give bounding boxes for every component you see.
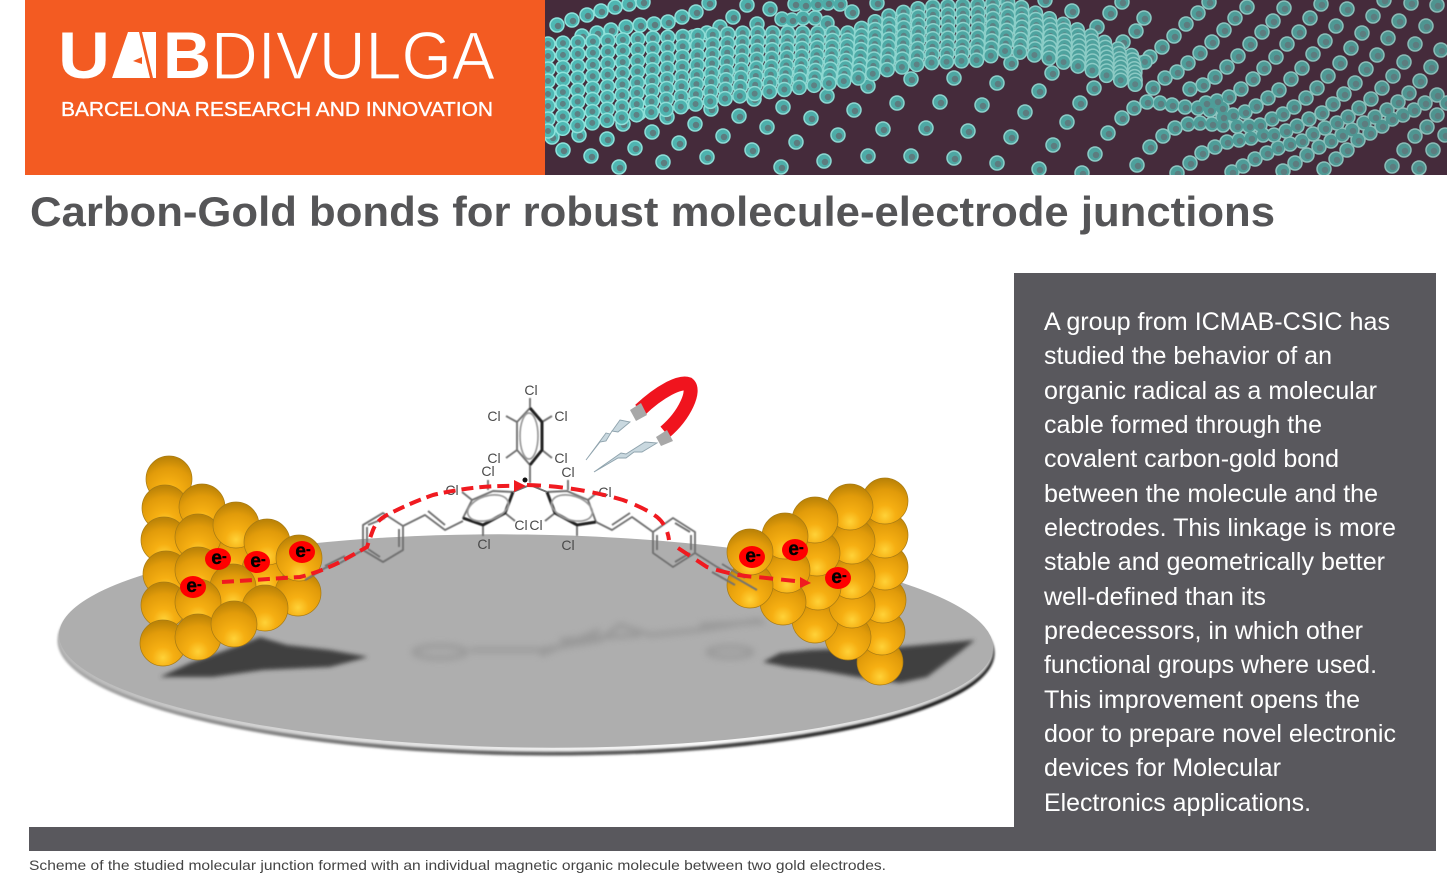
left vinylene and benzene linker <box>305 511 463 580</box>
electrons on left electrode: e <box>186 576 197 597</box>
chlorine labels: Cl <box>561 464 575 480</box>
logo: UAB DIVULGA: A <box>120 39 148 83</box>
logo: UAB DIVULGA: B <box>163 18 211 92</box>
right chlorinated ring <box>545 480 598 536</box>
electrons on right electrode <box>739 539 851 589</box>
panel: description text: door to prepare novel electronic <box>1044 720 1396 748</box>
icon: magnet <box>630 383 691 446</box>
panel: description text: functional groups where used. <box>1044 651 1377 679</box>
right vinylene and benzene linker <box>596 513 757 590</box>
logo: UAB DIVULGA <box>58 18 496 94</box>
header banner <box>25 0 1447 175</box>
electrons on right electrode: - <box>799 539 804 555</box>
panel: description text: cable formed through the <box>1044 411 1322 439</box>
chlorine labels: Cl <box>598 484 612 500</box>
chlorine labels: Cl <box>529 517 543 533</box>
panel: description text: covalent carbon-gold bond <box>1044 445 1339 473</box>
left chlorinated ring <box>462 480 515 536</box>
panel: description text: stable and geometrically better <box>1044 548 1385 576</box>
electrons on left electrode: e <box>211 548 222 569</box>
left gold electrode <box>140 456 322 666</box>
chlorine labels: Cl <box>477 536 491 552</box>
molecule structure <box>305 382 757 590</box>
chlorine labels: Cl <box>481 463 495 479</box>
chlorine labels: Cl <box>554 408 568 424</box>
electrons on left electrode: e <box>295 541 306 562</box>
panel: description text: A group from ICMAB-CSIC has <box>1044 308 1390 336</box>
chlorine labels: Cl <box>487 408 501 424</box>
electrons on left electrode: - <box>222 548 227 564</box>
caption: Scheme of the studied molecular junction formed with an individual magnetic organic molecule between two gold electrodes. <box>29 857 886 873</box>
top chlorinated ring <box>506 398 552 483</box>
silver disk surface <box>56 528 996 762</box>
icon: magnetic field bolts <box>586 420 657 472</box>
radical centre <box>513 478 547 492</box>
chlorine labels: Cl <box>514 517 528 533</box>
chlorine labels: Cl <box>445 482 459 498</box>
panel: description text: electrodes. This linkage is more <box>1044 514 1396 542</box>
electrons on right electrode: - <box>842 567 847 583</box>
electrons on left electrode: - <box>306 541 311 557</box>
electrons on right electrode: e <box>788 539 799 560</box>
arrow: electron path left to centre <box>222 480 526 582</box>
arrow: electron path centre to right <box>527 485 811 588</box>
illustration: molecular junction <box>56 382 996 762</box>
right gold electrode <box>727 478 908 685</box>
electrons on right electrode: - <box>756 546 761 562</box>
electrons on left electrode: - <box>261 551 266 567</box>
electrons on left electrode: - <box>197 576 202 592</box>
chlorine labels: Cl <box>561 537 575 553</box>
electrons on right electrode: e <box>745 546 756 567</box>
electrons on left electrode: e <box>250 551 261 572</box>
panel: description text <box>1014 273 1436 851</box>
panel: description text: well-defined than its <box>1043 583 1266 611</box>
chlorine labels: Cl <box>524 382 538 398</box>
panel: description text: studied the behavior of an <box>1044 342 1332 370</box>
panel: description text: devices for Molecular <box>1044 754 1281 782</box>
title: Carbon-Gold bonds for robust molecule-electrode junctions <box>30 188 1275 235</box>
orange logo block <box>25 0 546 175</box>
chlorine labels: Cl <box>554 450 568 466</box>
panel: description text: between the molecule and the <box>1044 480 1378 508</box>
panel: description text: Electronics applications. <box>1044 789 1311 817</box>
chlorine labels <box>445 382 612 553</box>
dotted molecular pattern image <box>545 0 1447 175</box>
electrons on left electrode <box>180 541 315 598</box>
electrons on right electrode: e <box>831 567 842 588</box>
shadows on the disk <box>160 620 975 683</box>
chlorine labels: Cl <box>487 450 501 466</box>
panel: description text: organic radical as a molecular <box>1044 377 1377 405</box>
logo: UAB DIVULGA: U <box>58 18 110 92</box>
bottom bar <box>29 827 1436 851</box>
logo tagline: BARCELONA RESEARCH AND INNOVATION <box>61 99 493 121</box>
logo: UAB DIVULGA: DIVULGA <box>211 18 496 94</box>
panel: description text: predecessors, in which other <box>1044 617 1363 645</box>
panel: description text: This improvement opens the <box>1044 686 1360 714</box>
